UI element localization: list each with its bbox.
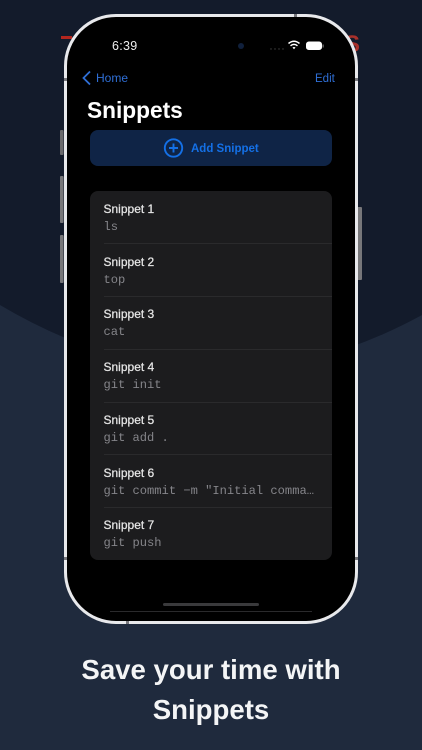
caption: Save your time with: [81, 654, 341, 685]
phone frame: [64, 14, 358, 624]
caption: Snippets: [153, 694, 269, 725]
snippet 6: [104, 466, 332, 508]
snippet 1: [104, 202, 332, 244]
red heading fragment behind phone, right: S: [344, 31, 360, 58]
home indicator: [163, 603, 259, 606]
plus icon: [164, 138, 184, 158]
snippet 7: git push: [104, 536, 162, 550]
snippet 3: Snippet 3: [104, 307, 154, 321]
snippet 1: Snippet 1: [104, 202, 154, 216]
back nav chevron: [82, 70, 91, 86]
snippet 5: git add .: [104, 430, 169, 444]
snippet 3: [104, 307, 332, 350]
side buttons: left: [60, 130, 64, 283]
red heading fragment behind phone, left: [61, 36, 72, 39]
screen title: Snippets: [87, 97, 183, 123]
back nav label: Home: [96, 71, 128, 85]
snippet 7: [104, 518, 162, 550]
snippet 2: top: [104, 272, 125, 286]
bottom hairline: [110, 611, 312, 612]
snippet 5: [104, 412, 332, 455]
side button: right: [357, 207, 362, 280]
add snippet button: [90, 130, 332, 166]
button label: Add Snippet: [191, 143, 259, 155]
snippet 5: Snippet 5: [104, 412, 154, 426]
snippet 4: Snippet 4: [104, 360, 154, 374]
snippet 2: [104, 254, 332, 297]
snippet 2: Snippet 2: [104, 254, 154, 268]
snippet 4: [104, 360, 332, 403]
snippet list panel: [90, 191, 332, 560]
snippet 6: Snippet 6: [104, 466, 154, 480]
status icons: [270, 40, 324, 50]
camera dot: [238, 43, 244, 49]
snippet 6: git commit −m "Initial comma…: [104, 484, 314, 498]
snippet 3: cat: [104, 325, 125, 339]
snippet 7: Snippet 7: [104, 518, 154, 532]
snippet 1: ls: [104, 220, 118, 234]
edit button: Edit: [315, 73, 335, 85]
caption: [81, 654, 341, 725]
snippet 4: git init: [104, 378, 162, 392]
status bar time: 6:39: [112, 39, 138, 53]
